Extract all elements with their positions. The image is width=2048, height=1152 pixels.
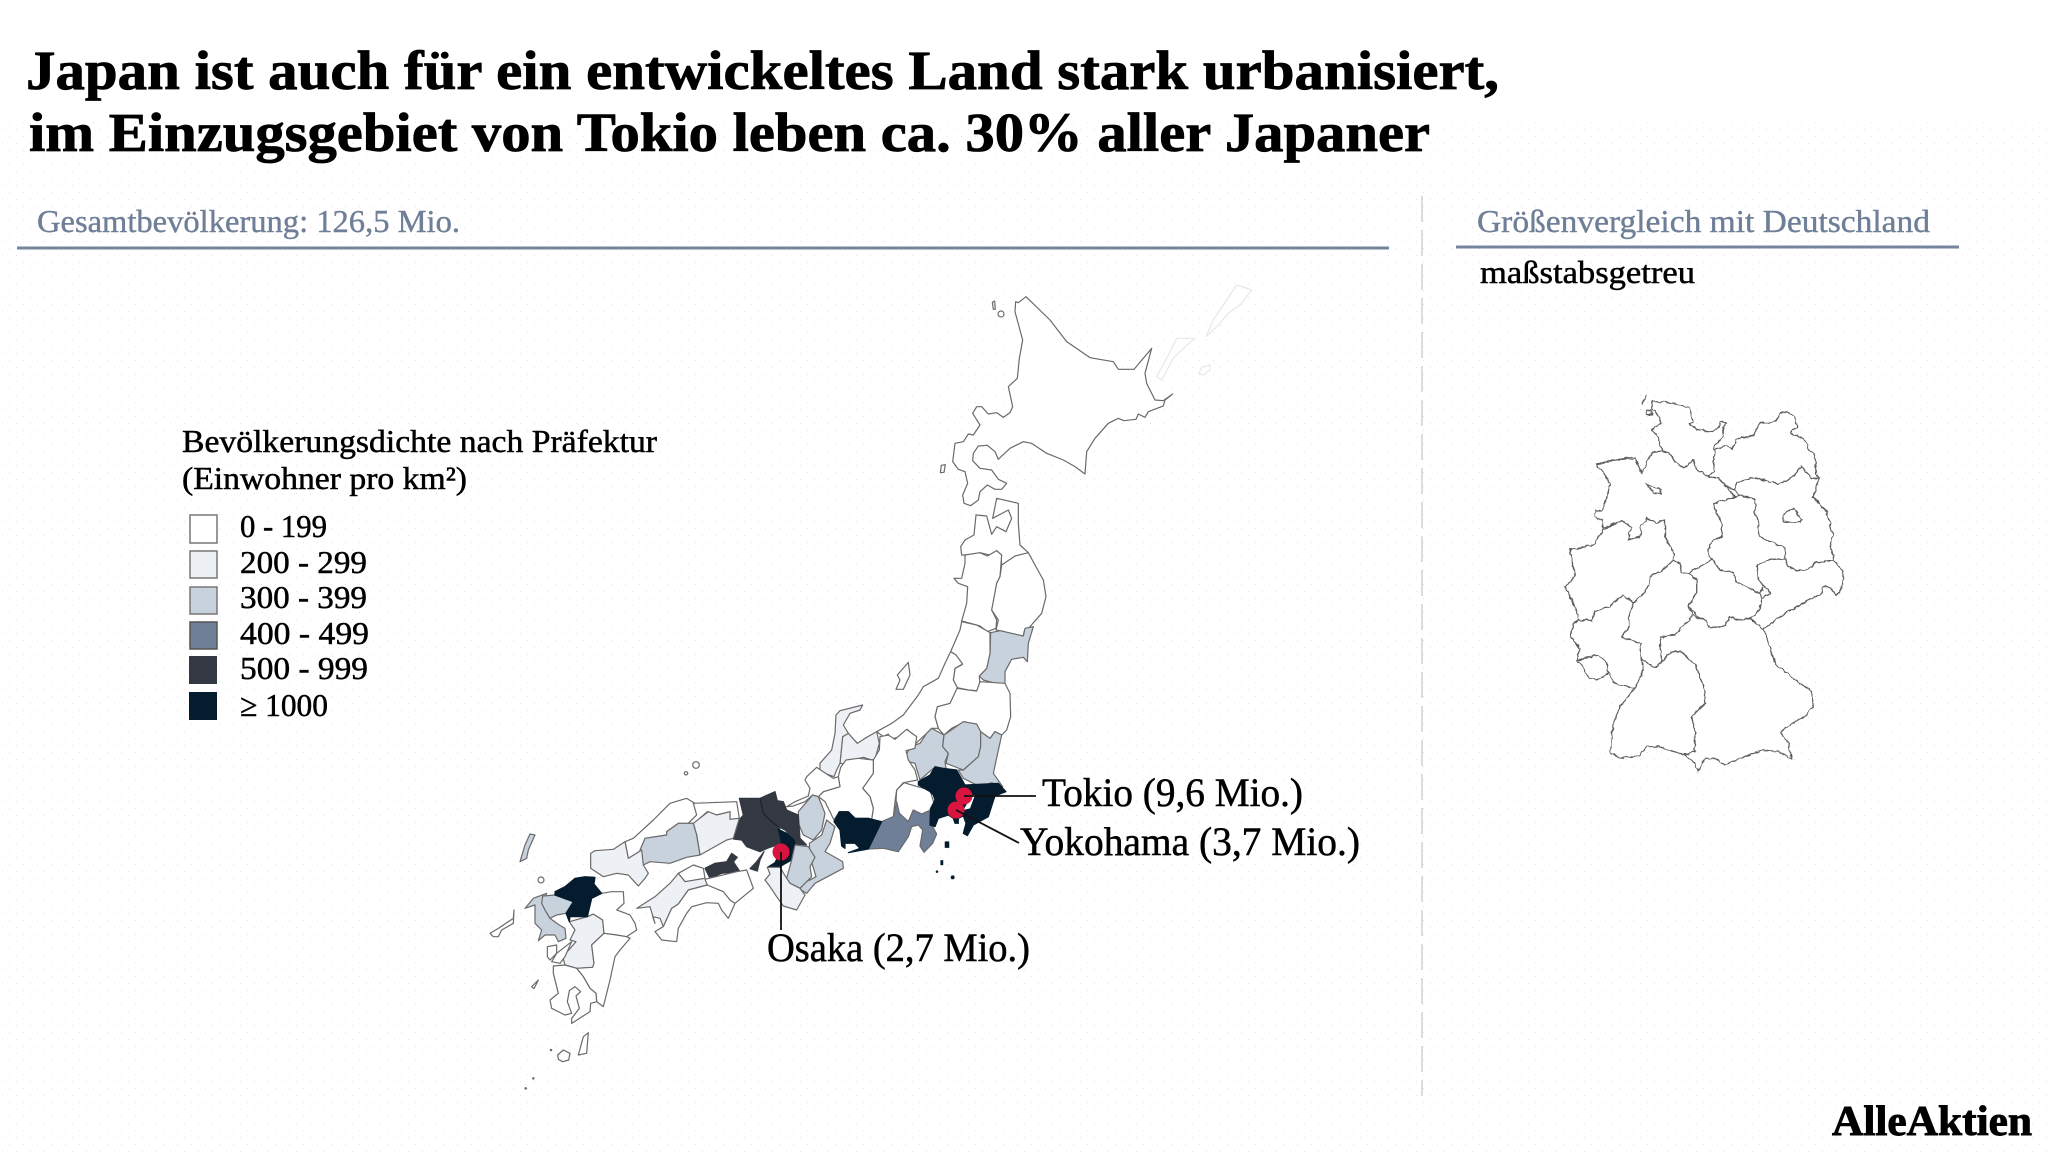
central Honshu prefectures: [787, 729, 937, 893]
legend: population density: Bevölkerungsdichte nach Präfektur: [182, 423, 657, 459]
western Japan: Chugoku, Shikoku, Kyushu: [490, 762, 753, 1089]
logo: AlleAktien: AlleAktien: [1832, 1099, 2032, 1145]
legend: population density: 0 - 199: [240, 508, 327, 544]
title: im Einzugsgebiet von Tokio leben ca. 30% aller Japaner: [29, 102, 1430, 163]
right panel heading: size comparison: maßstabsgetreu: [1480, 254, 1695, 290]
right panel heading: size comparison: Größenvergleich mit Deutschland: [1477, 203, 1930, 239]
marker: Yokohama: [948, 802, 1019, 843]
legend: population density: 400 - 499: [240, 615, 369, 651]
legend: population density: 200 - 299: [240, 544, 367, 580]
left panel heading: total population: [17, 203, 1389, 250]
Kuril islands: [1157, 285, 1252, 380]
map: Germany federal states: [1565, 395, 1843, 772]
Kanto region: [918, 767, 1006, 879]
legend: population density: 500 - 999: [240, 650, 368, 686]
northern Honshu prefectures: [820, 622, 1033, 787]
Kinki region: [705, 792, 815, 910]
legend: population density: [182, 423, 657, 723]
legend: population density: ≥ 1000: [240, 687, 328, 723]
legend: population density: 300 - 399: [240, 579, 367, 615]
left panel heading: total population: Gesamtbevölkerung: 126,5 Mio.: [37, 203, 460, 239]
label: Osaka: Osaka (2,7 Mio.): [767, 925, 1030, 970]
city markers and leader lines: [772, 788, 1036, 930]
map: Japan prefectures: [490, 285, 1360, 1089]
marker: Osaka: [772, 844, 790, 930]
marker: Tokio: [956, 788, 1036, 804]
northern Japan: Hokkaido and northern Tohoku: [940, 285, 1252, 638]
label: Tokio: Tokio (9,6 Mio.): [1042, 770, 1303, 815]
label: Yokohama: Yokohama (3,7 Mio.): [1020, 819, 1360, 864]
title: Japan ist auch für ein entwickeltes Land stark urbanisiert,: [26, 40, 1499, 101]
legend: population density: (Einwohner pro km²): [182, 460, 467, 496]
right panel heading: size comparison: [1456, 203, 1959, 290]
title: [26, 40, 1499, 163]
